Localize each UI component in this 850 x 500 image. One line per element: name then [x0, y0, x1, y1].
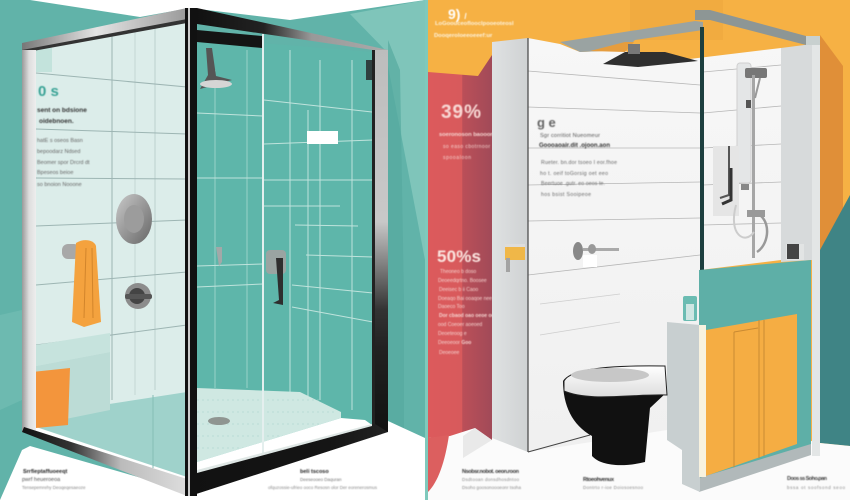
red stat list: Theoneo b doso [440, 269, 476, 275]
bottom right-center caption: Nsobsr.nobot. oeon.roon [462, 469, 520, 475]
red stat list: Deoeoee [439, 350, 460, 356]
icon: towel on rail [62, 240, 101, 327]
bottom left caption [22, 469, 86, 490]
red stat 50%: 50%s [437, 247, 481, 266]
bottom center caption: beli tscoso [300, 469, 329, 475]
red stat list: Deeisec b ii Caoo [439, 287, 478, 293]
right panel: orange background [425, 0, 850, 500]
center shower frame [190, 8, 388, 496]
icon: shower head [200, 48, 232, 89]
bottom center caption: Deeseooeo Daquran [300, 477, 342, 482]
bottom right caption: Doos ss Soho.pan [787, 476, 828, 482]
bottom left caption: pwrf heueroeoa [22, 477, 61, 483]
left pane text block [37, 107, 90, 188]
red stat list: Deeoeoor Goo [438, 340, 471, 346]
right wall text block: Goooaoair.dit .ojoon.aon [539, 143, 610, 149]
icon: small cup on ledge [786, 244, 804, 260]
bottom left caption: Srrfieptaffuoeeqt [23, 469, 67, 475]
icon: soap bottle [683, 296, 697, 321]
bottom toilet caption: Rtoeohvenux [583, 477, 615, 483]
left pane text block: hatE s oseos Basn [37, 138, 83, 144]
bottom right caption: bssa ot soofsond seoo [787, 485, 845, 490]
icon: round wall dial [116, 194, 152, 244]
left pane: pale tiled wall [22, 8, 187, 482]
right wall text block: hos bsist Sooipeoe [541, 192, 591, 198]
orange panel heading and text: Dooqeroloeeoeeef:ur [434, 33, 493, 39]
grey column [492, 38, 528, 452]
red stat list: Dor cbaod oao oeoe oeoc Toefe [439, 313, 515, 319]
red stat list [438, 269, 515, 356]
orange panel heading and text [434, 6, 514, 39]
white tiled wall [528, 36, 820, 456]
glass divider [700, 27, 704, 270]
icon: wall paper holder [573, 242, 619, 267]
left pane text block: Bpeseos beioe [37, 170, 73, 176]
right wall text heading: g e [537, 115, 556, 130]
red stat list: Daoeco Too [438, 304, 465, 310]
left pane text block: oidebnoen. [39, 118, 74, 125]
bottom center caption: ofquzossie-ufrieo ooco Resosn olor Der eorenerosmus [268, 485, 378, 490]
bottom toilet caption [583, 477, 643, 490]
bottom left caption: Tensepemrehy Deoqeqesaeoze [22, 485, 86, 490]
left pane stat heading: 0 s [38, 83, 59, 100]
left pane text block: so bnoion Nooone [37, 182, 82, 188]
right wall text block: Rueter. bn.dor tsoeo I eor.fhoe [541, 160, 617, 166]
left pane: bench and orange towel [32, 333, 110, 428]
red stat list: Deoeedqrtno. Boosee [438, 278, 487, 284]
left pane text block: Beomer spor Drcrd dt [37, 160, 90, 166]
left pane text block: bepoodarz Ndsed [37, 149, 80, 155]
red stat description: so easo cbotrnoor [443, 144, 490, 150]
right wall text block: ho t. oeif toGorsig oet eeo [540, 171, 608, 177]
orange panel heading and text: LoGoouceoflooclpooeoteosl [435, 21, 514, 27]
red stat description: spooaloon [443, 155, 471, 161]
icon: wall valve [216, 247, 222, 266]
icon: hand shower rail [713, 63, 767, 258]
red stat list: Deoeteoog e [438, 331, 467, 337]
red stat description: soeronoson baooond dueoo [439, 132, 516, 138]
vanity cabinet [667, 260, 811, 492]
bottom right-center caption: Dsdtooan donsdhosdntoo [462, 477, 519, 482]
orange panel heading and text: 9) / [448, 6, 467, 22]
rain shower head and ceiling frame [560, 10, 820, 67]
center shower: teal tiled wall [197, 38, 373, 474]
toilet [563, 366, 667, 465]
bottom center caption [268, 469, 378, 490]
right panel: teal wedge [820, 195, 850, 446]
icon: wall lever handle [125, 283, 152, 309]
right panel: white floor [428, 415, 850, 500]
right wall text block [539, 133, 617, 198]
left pane text block: sent on bdsione [37, 107, 87, 114]
bottom right caption [787, 476, 845, 490]
bottom toilet caption: Dontrto r-ioe Doiosoesnoo [583, 485, 643, 490]
icon: door handle [266, 250, 286, 305]
icon: wall bracket on grey column [505, 244, 525, 272]
red stat 39%: 39% [441, 102, 481, 123]
bottom right-center caption: Dsoho goosonoooeonr tsoha [462, 485, 521, 490]
icon: floor drain [208, 417, 230, 425]
red stat list: ood Coeoer aoeoed [438, 322, 482, 328]
red stat description [439, 132, 516, 161]
red stat list: Doeaqo Bai ooaqoe nee [438, 296, 492, 302]
red stats column [428, 55, 492, 492]
right wall text block: Beertuoe .gutr. eo oeos te. [541, 181, 605, 187]
right wall text block: Sgr corritiot Nueomeur [540, 133, 600, 139]
left shower frame [22, 8, 197, 496]
left panel: teal background [0, 0, 425, 500]
bottom right-center caption [462, 469, 521, 490]
